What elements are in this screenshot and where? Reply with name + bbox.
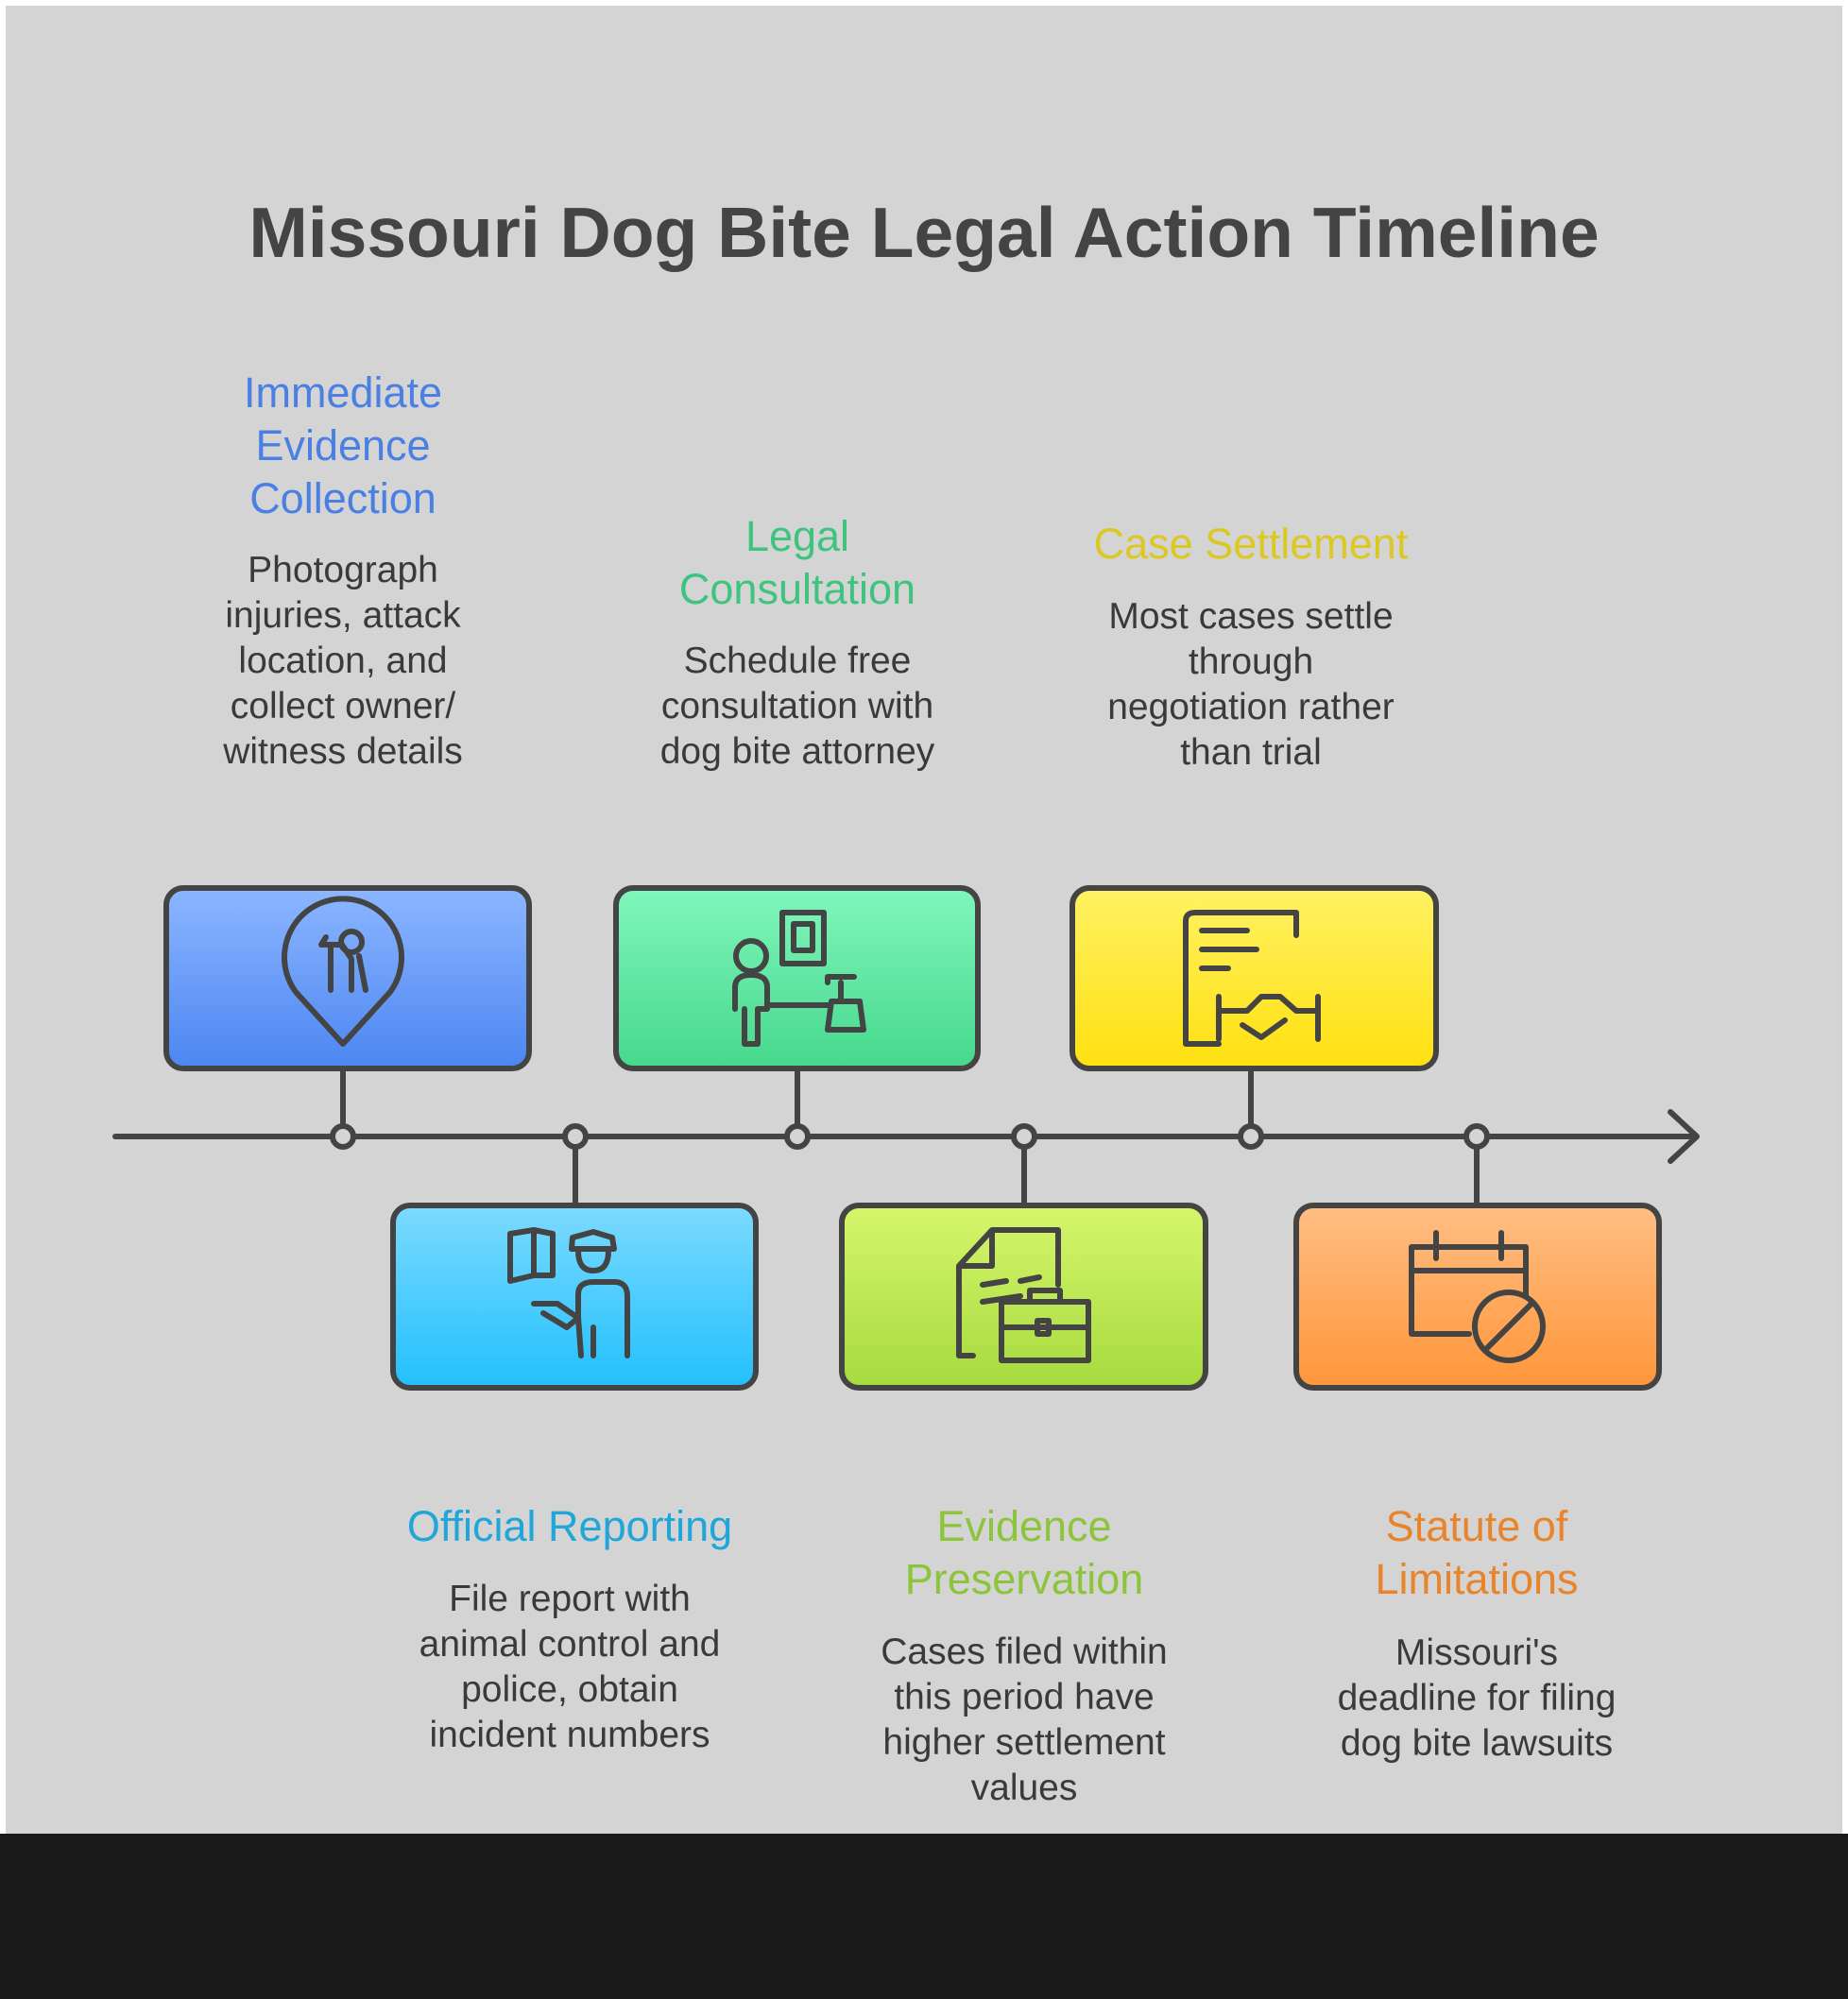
text: case settlement: Case Settlement (1094, 520, 1408, 568)
box: statute of limitations (1296, 1205, 1659, 1388)
text: evidence preservation (881, 1502, 1168, 1808)
box: evidence collection (166, 888, 529, 1068)
icon: document handshake (1186, 913, 1318, 1044)
text: evidence preservation: values (971, 1768, 1077, 1808)
text: official reporting (407, 1502, 732, 1755)
text: statute of limitations: Missouri's (1395, 1632, 1558, 1673)
text: case settlement: negotiation rather (1107, 687, 1395, 727)
text: legal consultation: consultation with (661, 686, 933, 726)
text: evidence preservation: Cases filed within (881, 1632, 1168, 1672)
text: immediate evidence collection: collect owner/ (231, 686, 455, 726)
text: immediate evidence collection: witness details (223, 731, 463, 772)
connectors (343, 1068, 1477, 1205)
text: immediate evidence collection: Collection (249, 474, 436, 522)
icon: documents and briefcase (959, 1230, 1088, 1360)
text: immediate evidence collection: Immediate (244, 368, 442, 417)
box: evidence preservation (842, 1205, 1206, 1388)
text: statute of limitations: Statute of (1386, 1502, 1567, 1550)
text: immediate evidence collection: Photograph (248, 550, 438, 590)
text: case settlement (1094, 520, 1408, 773)
text: statute of limitations: deadline for filing (1338, 1678, 1616, 1718)
text: statute of limitations: Limitations (1375, 1555, 1579, 1603)
icon: location pin person (284, 898, 402, 1044)
text: legal consultation (660, 512, 935, 772)
text: case settlement: through (1189, 641, 1313, 682)
text: evidence preservation: higher settlement (882, 1722, 1166, 1763)
text: official reporting: File report with (449, 1579, 691, 1619)
box: legal consultation (616, 888, 978, 1068)
text: immediate evidence collection: Evidence (255, 421, 431, 470)
text: legal consultation: Consultation (679, 565, 915, 613)
box: official reporting (393, 1205, 756, 1388)
text: immediate evidence collection (223, 368, 463, 772)
text: statute of limitations (1338, 1502, 1616, 1764)
icon: consultation (735, 913, 864, 1044)
box: case settlement (1072, 888, 1436, 1068)
text: immediate evidence collection: injuries, attack (225, 595, 461, 636)
text: official reporting: Official Reporting (407, 1502, 732, 1550)
axis arrow (115, 1112, 1697, 1161)
text: evidence preservation: this period have (894, 1677, 1155, 1717)
text: case settlement: Most cases settle (1108, 596, 1394, 637)
text: official reporting: animal control and (419, 1624, 720, 1665)
icon: calendar blocked (1412, 1233, 1543, 1360)
text: immediate evidence collection: location, and (238, 641, 448, 681)
text: legal consultation: Legal (745, 512, 849, 560)
text: official reporting: police, obtain (461, 1669, 678, 1710)
icon: officer (510, 1230, 627, 1356)
text: evidence preservation: Preservation (905, 1555, 1143, 1603)
footer bar (0, 1834, 1848, 1999)
text: case settlement: than trial (1180, 732, 1322, 773)
text: legal consultation: dog bite attorney (660, 731, 934, 772)
title: Missouri Dog Bite Legal Action Timeline (248, 193, 1600, 272)
text: official reporting: incident numbers (429, 1715, 710, 1755)
text: statute of limitations: dog bite lawsuits (1341, 1723, 1613, 1764)
dots (333, 1126, 1487, 1147)
text: legal consultation: Schedule free (684, 641, 911, 681)
text: evidence preservation: Evidence (936, 1502, 1112, 1550)
